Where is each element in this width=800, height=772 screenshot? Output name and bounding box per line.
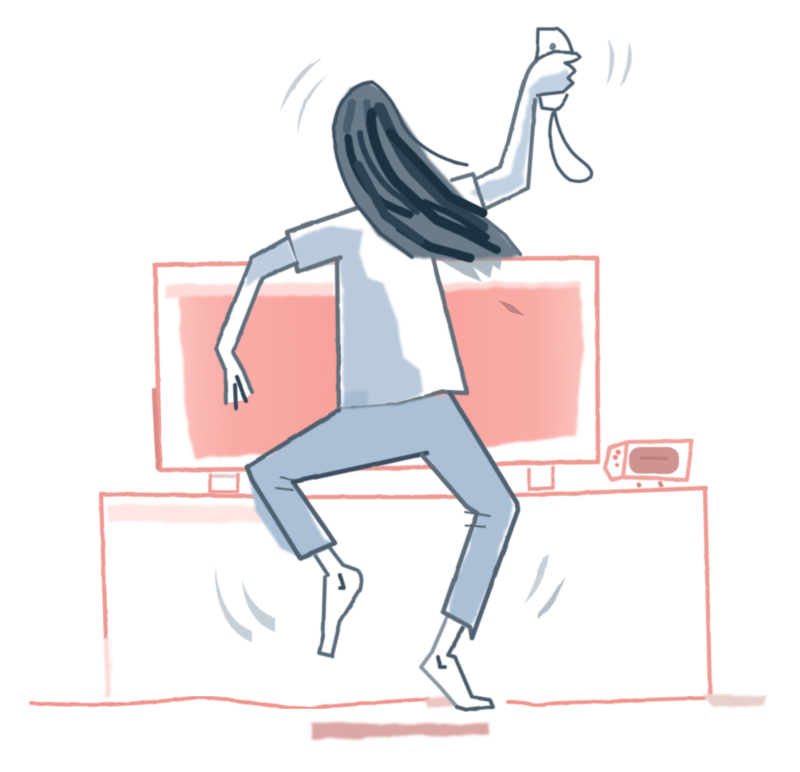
motion marks [215, 39, 632, 642]
console screen [629, 447, 679, 474]
floor line [31, 697, 705, 708]
long black hair [333, 82, 522, 282]
small stroke on TV [498, 300, 525, 316]
hair translucent tips [436, 250, 502, 282]
raised arm [452, 55, 578, 210]
hair base [333, 82, 522, 260]
jeans [247, 393, 518, 638]
figure [216, 29, 591, 710]
console shelf wash [105, 504, 268, 700]
dark hair strands [347, 103, 497, 258]
left arm [216, 238, 297, 408]
TV screen watercolor wash [165, 282, 583, 459]
T-shirt [287, 208, 467, 412]
TV stand feet [210, 466, 553, 492]
media console [101, 488, 710, 695]
TV frame [154, 258, 598, 470]
hair outline strokes [334, 82, 520, 257]
game console on shelf [605, 441, 692, 487]
floor shadow patches [311, 694, 768, 740]
feet [315, 548, 493, 710]
phone and hand [537, 29, 591, 181]
